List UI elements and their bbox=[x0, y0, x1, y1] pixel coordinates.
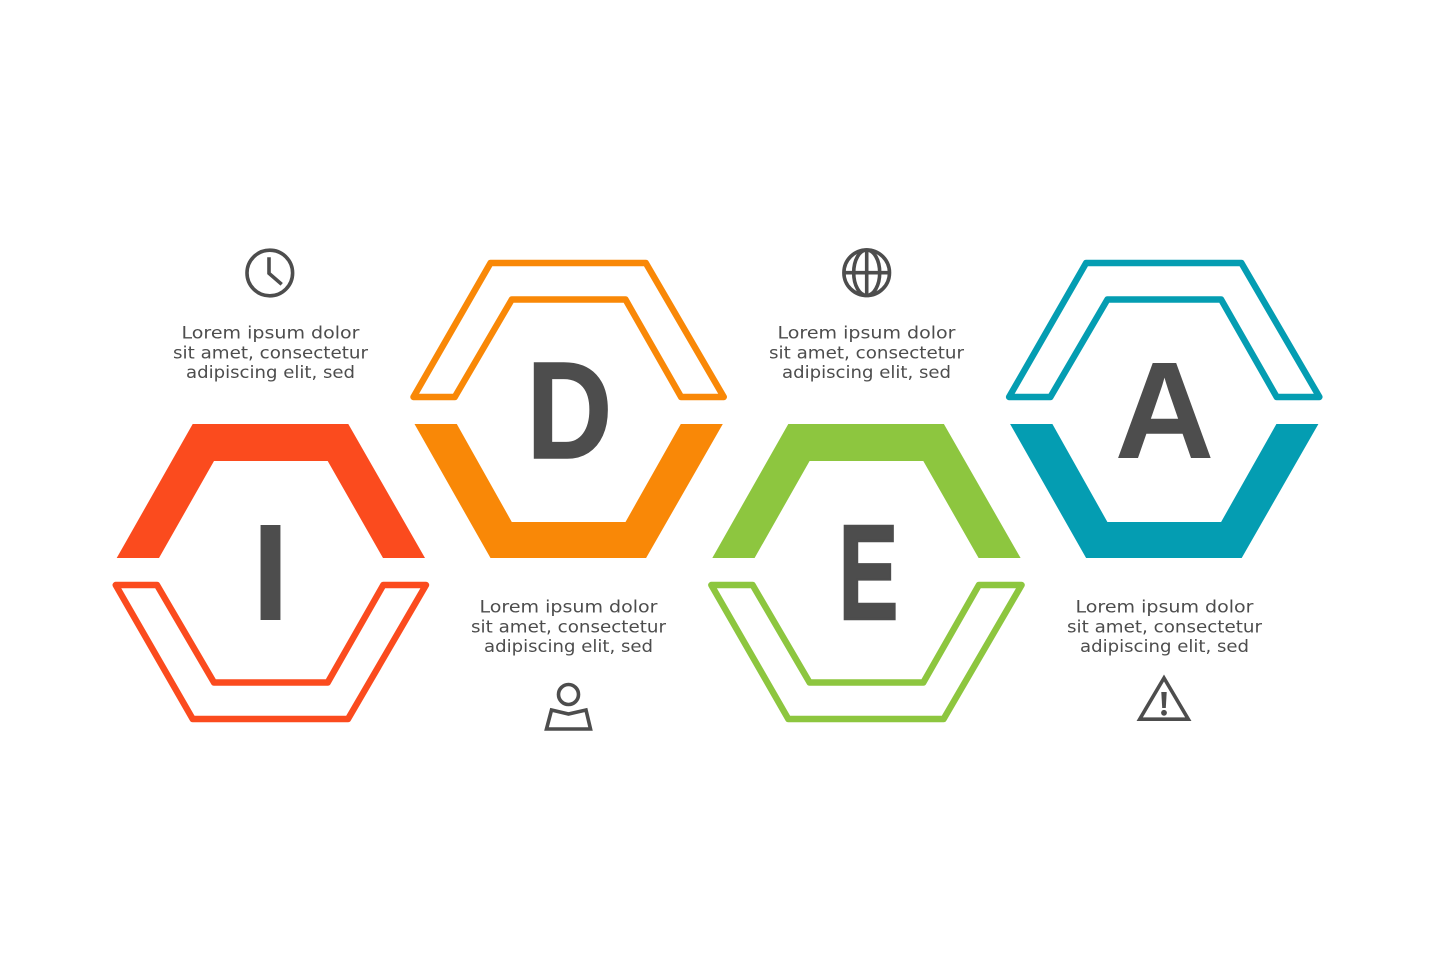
letter E: E bbox=[838, 498, 898, 648]
text block: top middle bbox=[769, 323, 964, 383]
letter I: I bbox=[251, 496, 290, 650]
icon: person on map bbox=[546, 684, 590, 729]
letter A: A bbox=[1115, 334, 1214, 488]
text block: bottom middle left: Lorem ipsum dolor bbox=[480, 597, 658, 617]
filled bottom band bbox=[414, 424, 723, 558]
icon: warning triangle bbox=[1140, 678, 1188, 719]
letter D: D bbox=[526, 334, 612, 488]
text block: bottom middle left: sit amet, consectetur bbox=[471, 617, 666, 637]
text block: top left: adipiscing elit, sed bbox=[186, 363, 355, 383]
panel: letter I hexagon bbox=[116, 424, 426, 719]
outlined bottom band bbox=[711, 585, 1022, 719]
outlined top band bbox=[414, 263, 724, 397]
panel: letter D hexagon bbox=[414, 263, 724, 558]
text block: top middle: sit amet, consectetur bbox=[769, 343, 964, 363]
icon: clock bbox=[247, 250, 293, 296]
text block: bottom right: adipiscing elit, sed bbox=[1080, 637, 1249, 657]
panel: letter A hexagon bbox=[1009, 263, 1319, 558]
text block: top middle: adipiscing elit, sed bbox=[782, 363, 951, 383]
text block: top left: sit amet, consectetur bbox=[173, 343, 368, 363]
text block: bottom right: Lorem ipsum dolor bbox=[1076, 597, 1254, 617]
outlined bottom band bbox=[116, 585, 426, 719]
icon: globe bbox=[844, 250, 890, 296]
text block: bottom right: sit amet, consectetur bbox=[1067, 617, 1262, 637]
filled top band bbox=[117, 424, 425, 558]
text block: top left bbox=[173, 323, 368, 383]
filled top band bbox=[712, 424, 1021, 558]
panel: letter E hexagon bbox=[711, 424, 1022, 719]
outlined top band bbox=[1009, 263, 1319, 397]
text block: bottom middle left: adipiscing elit, sed bbox=[484, 637, 653, 657]
text block: bottom middle left bbox=[471, 597, 666, 657]
text block: top middle: Lorem ipsum dolor bbox=[778, 323, 956, 343]
text block: bottom right bbox=[1067, 597, 1262, 657]
text block: top left: Lorem ipsum dolor bbox=[182, 323, 360, 343]
filled bottom band bbox=[1010, 424, 1318, 558]
